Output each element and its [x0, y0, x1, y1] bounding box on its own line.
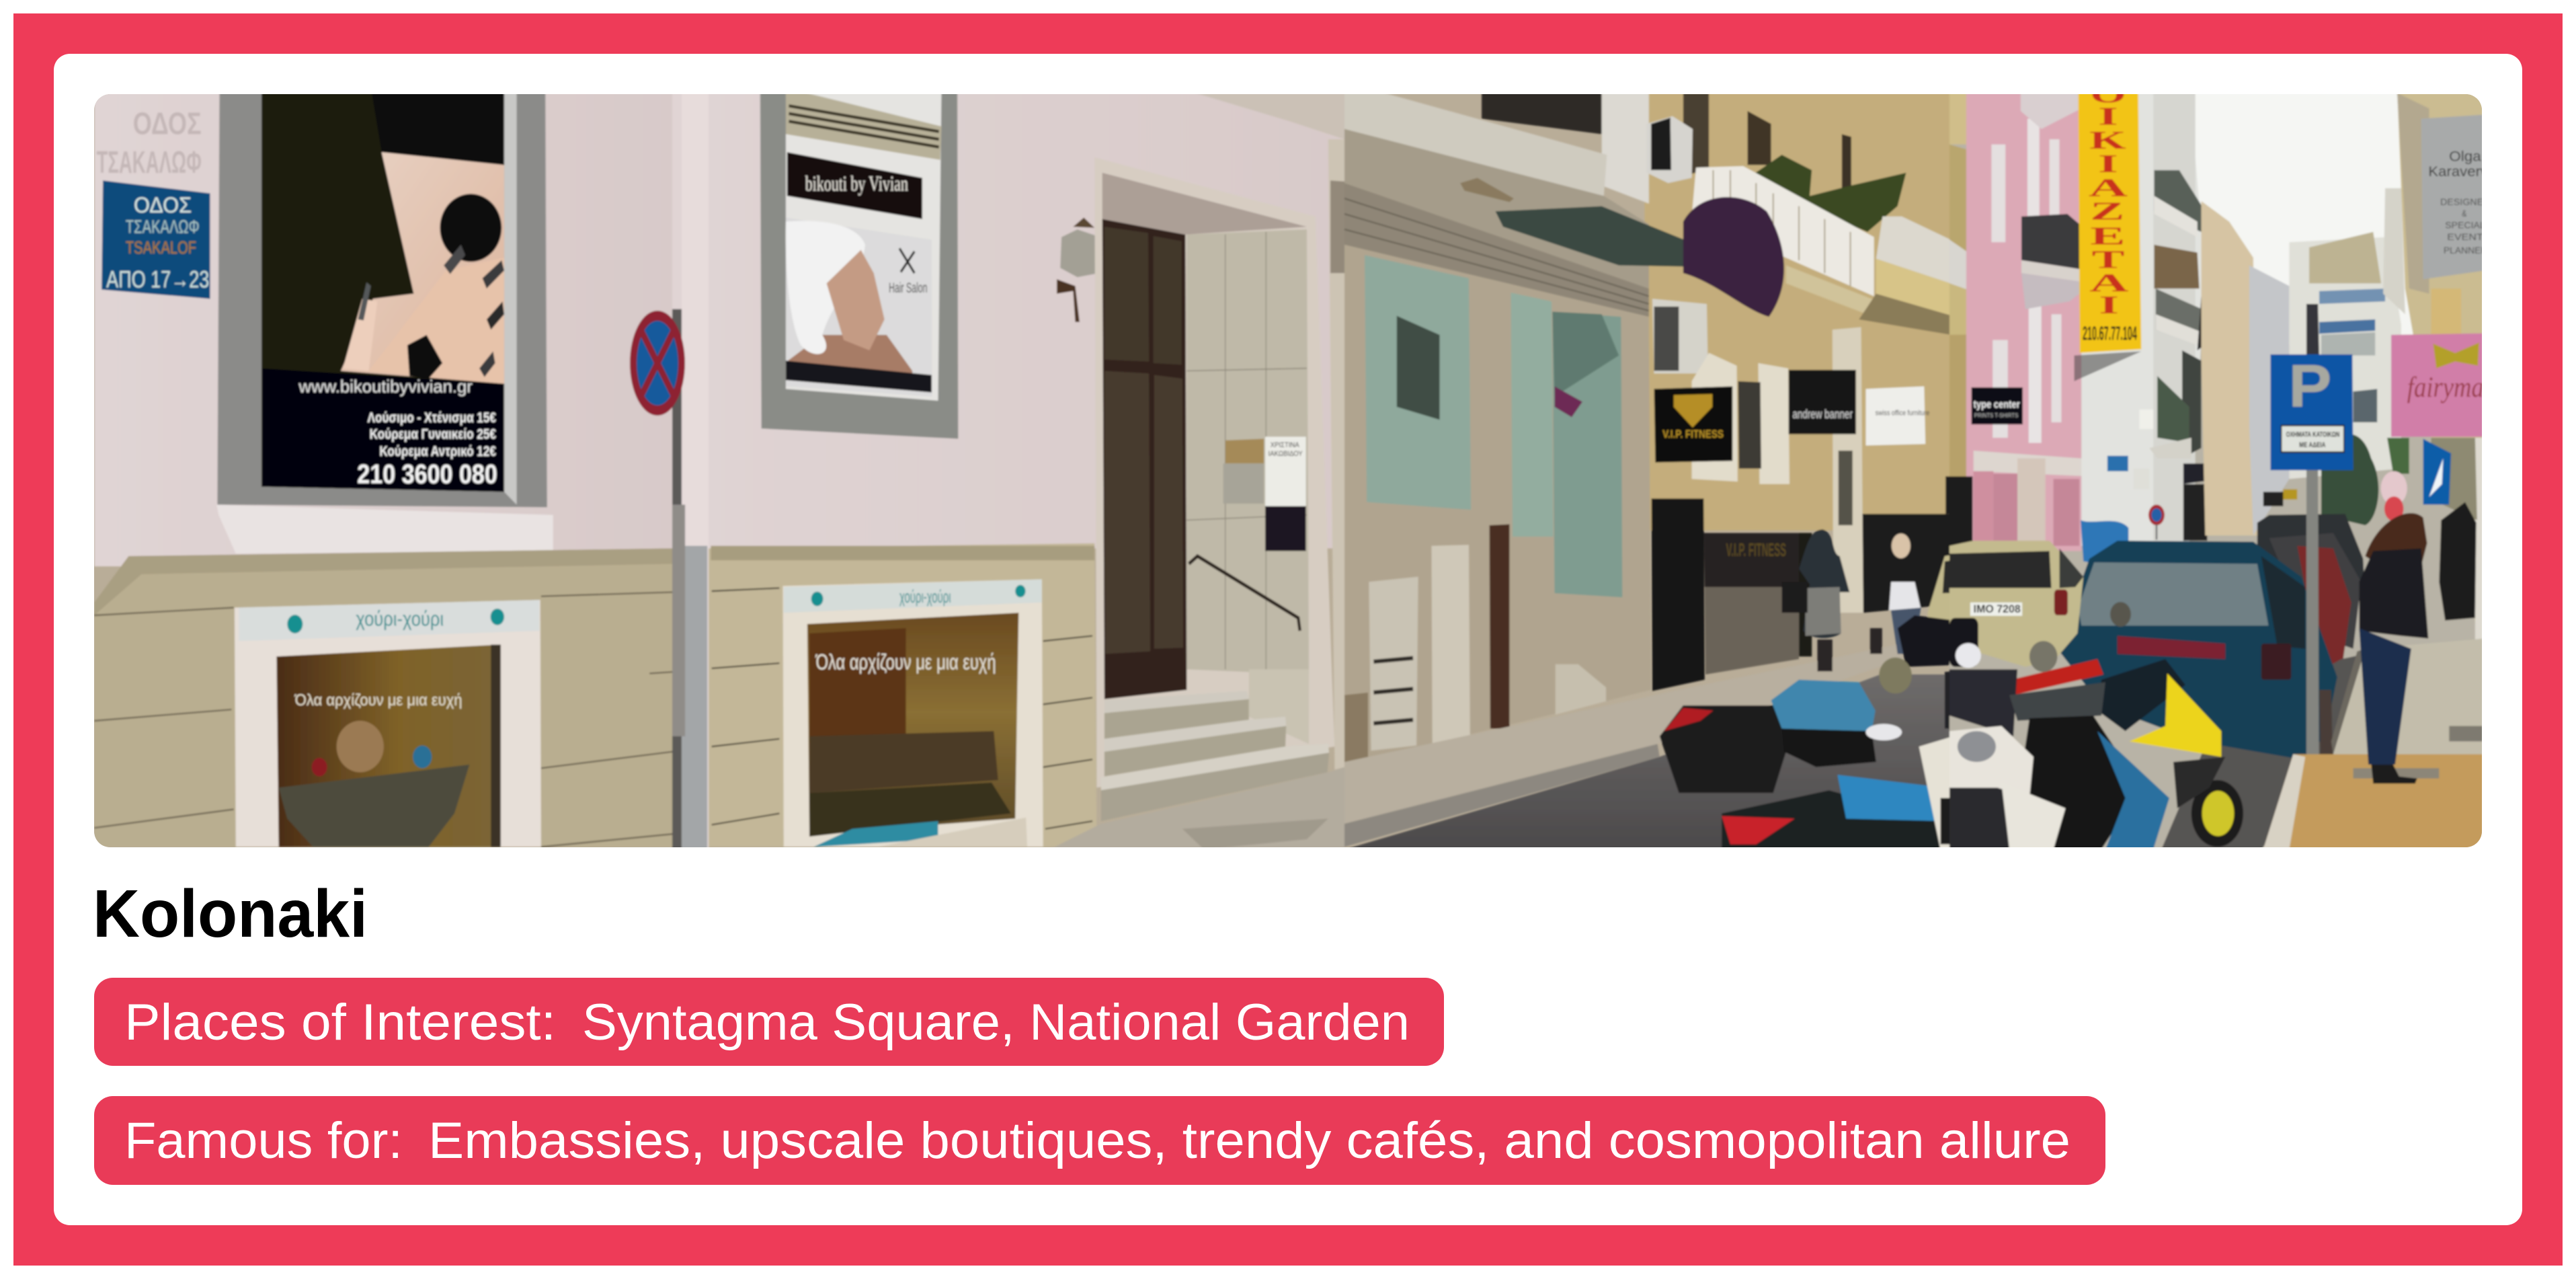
small far signs — [2263, 471, 2407, 521]
stair railing — [1189, 556, 1300, 631]
woman in striped skirt — [1782, 529, 1849, 638]
Olga Karaverva sign: Karaverva — [2428, 164, 2497, 180]
yellow rental banner: Ο — [2090, 80, 2126, 108]
balconies column — [2149, 88, 2221, 541]
type center sign: type center — [1974, 399, 2020, 410]
famous for pill — [94, 1096, 2105, 1185]
yellow rental banner: Κ — [2089, 126, 2127, 155]
door and utility panels — [1344, 525, 1510, 762]
famous for pill: Embassies, upscale boutiques, trendy cafés, and cosmopolitan allure — [428, 1112, 2070, 1169]
woman in polka dot jacket — [1878, 533, 1929, 654]
pink building — [1966, 88, 2089, 551]
fairymade pink sign — [2391, 334, 2507, 436]
blue flag — [2423, 439, 2451, 505]
pedestrian in black — [2439, 502, 2477, 621]
cream lower wall — [709, 543, 1096, 847]
shop windows — [1365, 255, 1622, 597]
carved street name on the wall: ΤΣΑΚΑΛΩΦ — [97, 145, 202, 180]
blue street sign: ΑΠΟ 17→23 — [106, 266, 209, 293]
andrew banner sign — [1789, 370, 1856, 434]
yellow rental banner: Α — [2089, 268, 2129, 297]
wish-shop window: Όλα αρχίζουν με μια ευχή — [815, 650, 996, 674]
Olga Karaverva sign: DESIGNER — [2440, 197, 2491, 207]
yellow rental banner — [2078, 80, 2141, 353]
gift shop window with teal sign: χούρι-χούρι — [356, 607, 444, 630]
road — [2161, 654, 2365, 849]
right balcony — [1859, 217, 2009, 335]
far cars — [2257, 514, 2365, 669]
pilaster and pole — [672, 88, 709, 849]
salon poster — [261, 88, 517, 505]
parking sign: ΜΕ ΑΔΕΙΑ — [2299, 441, 2326, 449]
glass canopy — [1496, 206, 1714, 267]
window sill — [216, 505, 553, 553]
sidewalk — [1049, 767, 1344, 849]
photo section: shopfronts, yellow building and pedestrians — [1344, 88, 2017, 849]
entrance steps — [1101, 669, 1329, 821]
salon poster: Λούσιμο - Χτένισμα 15€ — [368, 410, 496, 426]
yellow rental banner: Ε — [2090, 222, 2126, 250]
kerb — [1344, 744, 1660, 847]
trees — [2321, 434, 2409, 525]
places of interest pill: Syntagma Square, National Garden — [582, 994, 1410, 1051]
intercom panel and notices: ΙΑΚΩΒΙΔΟΥ — [1269, 449, 1303, 458]
carved street name on the wall — [96, 112, 202, 173]
places of interest pill — [94, 978, 1444, 1066]
small steps — [1556, 664, 1606, 715]
blue street sign — [102, 180, 210, 299]
sidewalk paving — [2263, 638, 2485, 849]
photo section: corner building with salon poster — [94, 88, 672, 847]
next building stone — [1328, 139, 1344, 770]
dark door — [1102, 219, 1186, 699]
cream lower wall — [94, 549, 672, 847]
marble recess walls — [1186, 229, 1309, 674]
grey window frame — [760, 88, 958, 439]
beige building — [2202, 201, 2257, 535]
V.I.P. fitness sign: V.I.P. FITNESS — [1662, 428, 1724, 440]
type center sign: PRINTS T-SHIRTS — [1974, 412, 2018, 419]
road — [1344, 674, 2017, 849]
smart car: ΙΜΟ 7208 — [1974, 603, 2021, 616]
grey building — [2249, 266, 2289, 535]
parking sign: P — [2288, 353, 2331, 420]
Olga Karaverva sign: Olga — [2449, 149, 2481, 165]
Olga Karaverva sign: EVENT — [2447, 232, 2483, 242]
stone shopfront — [1344, 245, 1651, 762]
V.I.P. fitness sign — [1654, 386, 1732, 463]
intercom panel and notices: ΧΡΙΣΤΙΝΑ — [1271, 440, 1300, 449]
office furniture sign — [1866, 386, 1930, 445]
shop canopy and soffit — [1344, 129, 1649, 288]
distant buildings — [2289, 188, 2405, 479]
V.I.P. fitness storefront: V.I.P. FITNESS — [1726, 540, 1786, 561]
yellow rental banner: Α — [2089, 173, 2128, 202]
right side building — [2397, 88, 2485, 644]
wish-shop window — [783, 579, 1043, 847]
street photograph of Kolonaki — [94, 80, 2507, 849]
sidewalk — [1344, 644, 1902, 824]
Olga Karaverva sign — [2421, 114, 2497, 279]
recess ceiling — [1102, 173, 1307, 235]
hair salon poster: Hair Salon — [889, 280, 927, 297]
carved street name on the wall: ΟΔΟΣ — [133, 106, 202, 141]
blue Renault car — [2058, 541, 2337, 759]
yellow rental banner: Ι — [2099, 290, 2119, 319]
wish-shop window: χούρι-χούρι — [899, 587, 951, 607]
yellow rental banner: Ι — [2098, 150, 2118, 178]
gift shop window with teal sign: Όλα αρχίζουν με μια ευχή — [294, 691, 462, 709]
intercom panel and notices — [1223, 436, 1306, 551]
woman on the sidewalk — [2359, 513, 2428, 783]
bollards — [1817, 628, 1882, 671]
V.I.P. fitness storefront — [1652, 498, 1812, 691]
blue house number and small sign — [2107, 410, 2165, 540]
salon poster: www.bikoutibyvivian.gr — [298, 377, 473, 397]
places of interest pill: Places of Interest: — [124, 994, 556, 1051]
lamp on soffit — [1460, 178, 1514, 202]
louvred corner detail — [1330, 180, 1344, 273]
gift shop window with teal sign — [235, 600, 541, 847]
yellow rental banner: Τ — [2092, 245, 2125, 274]
hair salon poster — [786, 88, 942, 401]
no parking sign — [630, 311, 685, 416]
sky — [2137, 88, 2417, 345]
blue street sign: ΟΔΟΣ — [134, 194, 192, 217]
Olga Karaverva sign: PLANNER — [2444, 245, 2487, 256]
smart car — [1949, 541, 2083, 667]
photo section: far street, cars, sign and woman — [1949, 80, 2507, 849]
famous for pill: Famous for: — [124, 1112, 403, 1169]
salon poster: Κούρεμα Αντρικό 12€ — [379, 443, 496, 459]
scooters — [1949, 602, 2243, 849]
yellow building — [1644, 88, 2017, 531]
entrance surround — [1094, 157, 1334, 787]
hair salon poster: bikouti by Vivian — [805, 173, 908, 196]
fairymade pink sign: fairymade — [2407, 372, 2507, 403]
left yellow building balcony — [1949, 88, 2009, 490]
windows — [1692, 353, 1789, 484]
salon poster: 210 3600 080 — [357, 459, 497, 489]
louvred fascia — [1344, 183, 1649, 317]
parking pole — [2306, 304, 2333, 839]
blue street sign: TSAKALOF — [126, 238, 196, 258]
yellow rental banner: Ζ — [2090, 197, 2124, 225]
scooters — [1660, 615, 2017, 849]
yellow rental banner: 210.67.77.104 — [2083, 322, 2137, 344]
balcony railing and plants — [1692, 155, 1906, 319]
store front lower right — [1862, 476, 1972, 613]
office furniture sign: swiss office furniture — [1876, 410, 1930, 418]
parking sign: ΟΧΗΜΑΤΑ ΚΑΤΟΙΚΩΝ — [2286, 431, 2339, 439]
balcony slab — [1344, 88, 1607, 196]
grey window frame — [217, 88, 547, 507]
Olga Karaverva sign: & — [2462, 208, 2467, 219]
pink building balcony — [2021, 88, 2093, 309]
balcony soffit at top right — [1178, 88, 1344, 139]
wall lamp — [1057, 217, 1100, 322]
andrew banner sign: andrew banner — [1793, 408, 1853, 421]
dark shop sign — [1949, 476, 1972, 551]
salon poster: Κούρεμα Γυναικείο 25€ — [370, 426, 496, 442]
blue street sign: ΤΣΑΚΑΛΩΦ — [126, 217, 200, 237]
yellow rental banner: Ι — [2098, 102, 2118, 131]
smart car — [1927, 543, 2017, 659]
banner bracket — [2075, 351, 2141, 381]
heading: Kolonaki — [93, 876, 368, 952]
hanging purple plant — [1683, 197, 1784, 317]
photo section: salon window and entrance — [672, 88, 1344, 849]
Olga Karaverva sign: SPECIAL — [2445, 220, 2485, 231]
air conditioners — [1647, 116, 1708, 373]
upper balcony with railing — [1482, 88, 1851, 206]
white building — [2081, 88, 2206, 546]
parking sign — [2270, 353, 2353, 470]
graffiti wall — [2081, 520, 2128, 564]
side entrance — [1833, 327, 1863, 613]
type center sign — [1972, 387, 2023, 424]
pink building edge — [1962, 88, 2017, 541]
